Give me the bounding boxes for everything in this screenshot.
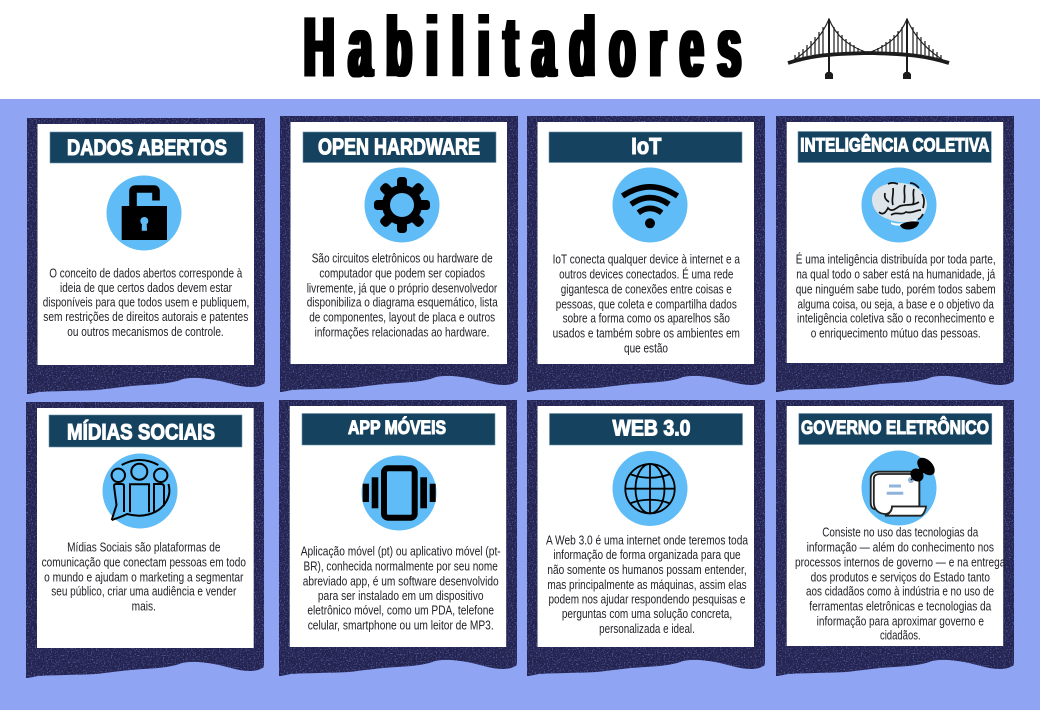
heading bbox=[50, 132, 243, 163]
card background bbox=[776, 400, 1014, 676]
description: informação para aproximar governo e bbox=[817, 615, 984, 629]
description bbox=[307, 251, 498, 339]
description bbox=[553, 252, 740, 355]
description: Mídias Sociais são plataformas de bbox=[67, 541, 220, 555]
heading bbox=[799, 414, 992, 444]
description: aos cidadãos como à indústria e no uso de bbox=[806, 585, 994, 599]
description bbox=[43, 266, 249, 339]
description: A Web 3.0 é uma internet onde teremos toda bbox=[546, 534, 748, 548]
description: computador que podem ser copiados bbox=[319, 266, 485, 280]
card body bbox=[290, 122, 507, 364]
card background bbox=[527, 116, 765, 392]
description: para ser instalado em um dispositivo bbox=[318, 589, 484, 603]
icon: people in speech bubble bbox=[102, 454, 178, 528]
description: IoT conecta qualquer device à internet e a bbox=[553, 252, 740, 266]
description: inteligência coletiva são o reconhecimento e bbox=[797, 312, 994, 326]
card body bbox=[538, 122, 754, 364]
heading bbox=[798, 132, 991, 162]
card body bbox=[787, 122, 1003, 363]
description bbox=[42, 541, 246, 614]
description bbox=[301, 545, 501, 633]
description: o enriquecimento mútuo das pessoas. bbox=[811, 326, 981, 340]
description: celular, smartphone ou um leitor de MP3. bbox=[308, 619, 494, 633]
panel: app moveis bbox=[279, 400, 517, 676]
heading: IoT bbox=[631, 133, 661, 159]
description: disponíveis para que todos usem e publiquem, bbox=[43, 296, 249, 310]
description: BR), conhecida normalmente por seu nome bbox=[304, 560, 498, 574]
panel: open hardware bbox=[280, 116, 518, 392]
icon: open padlock bbox=[106, 176, 182, 250]
card body bbox=[37, 408, 254, 648]
description: não somente os humanos possam entender, bbox=[547, 563, 747, 577]
panel: dados abertos bbox=[27, 118, 265, 394]
heading bbox=[550, 414, 742, 445]
description: informações relacionadas ao hardware. bbox=[315, 325, 489, 339]
description: perguntas com uma solução concreta, bbox=[562, 607, 732, 621]
card background bbox=[280, 116, 518, 392]
description: sobre a forma como os aparelhos são bbox=[563, 312, 730, 326]
card body bbox=[538, 406, 754, 647]
description: disponibiliza o diagrama esquemático, lista bbox=[307, 296, 498, 310]
heading bbox=[302, 414, 495, 445]
heading bbox=[549, 132, 742, 162]
description: São circuitos eletrônicos ou hardware de bbox=[312, 251, 493, 265]
description bbox=[795, 526, 1005, 643]
icon: gear bbox=[364, 168, 440, 242]
description: cidadãos. bbox=[880, 629, 921, 643]
description: mas principalmente as máquinas, assim elas bbox=[547, 578, 747, 592]
description: ou outros mecanismos de controle. bbox=[67, 325, 224, 339]
description: podem nos ajudar respondendo pesquisas e bbox=[548, 593, 746, 607]
description: abreviado app, é um software desenvolvido bbox=[303, 575, 499, 589]
card body bbox=[290, 406, 506, 647]
description: o mundo e ajudam o marketing a segmentar bbox=[44, 571, 243, 585]
description: É uma inteligência distribuída por toda parte, bbox=[796, 251, 996, 266]
heading bbox=[303, 132, 496, 162]
panel: midias sociais bbox=[26, 402, 264, 678]
description: ferramentas eletrônicas e tecnologias da bbox=[809, 600, 991, 614]
heading: INTELIGÊNCIA COLETIVA bbox=[800, 133, 989, 157]
description: livremente, já que o próprio desenvolvedor bbox=[307, 281, 497, 295]
card body bbox=[38, 124, 254, 365]
description: usados e também sobre os ambientes em bbox=[553, 326, 740, 340]
description: na qual todo o saber está na humanidade, já bbox=[796, 267, 995, 281]
description: que estão bbox=[624, 341, 668, 355]
heading: OPEN HARDWARE bbox=[318, 133, 480, 159]
description bbox=[796, 251, 996, 340]
icon: suspension bridge bbox=[788, 19, 949, 79]
description bbox=[546, 534, 748, 636]
description: Aplicação móvel (pt) ou aplicativo móvel (pt- bbox=[301, 545, 501, 559]
description: gigantesca de conexões entre coisas e bbox=[561, 282, 732, 296]
card background bbox=[527, 400, 765, 676]
description: Consiste no uso das tecnologias da bbox=[822, 526, 978, 540]
description: seu público, criar uma audiência e vender bbox=[51, 585, 236, 599]
card body bbox=[787, 406, 1003, 646]
card background bbox=[27, 118, 265, 394]
description: eletrônico móvel, como um PDA, telefone bbox=[307, 604, 494, 618]
heading: DADOS ABERTOS bbox=[67, 135, 227, 160]
description: ideia de que certos dados devem estar bbox=[60, 281, 232, 295]
description: informação de forma organizada para que bbox=[553, 548, 741, 562]
description: mais. bbox=[132, 600, 156, 614]
card background bbox=[279, 400, 517, 676]
icon: mobile phone vibrating bbox=[362, 456, 436, 530]
description: comunicação que conectam pessoas em todo bbox=[42, 556, 246, 570]
description: dos produtos e serviços do Estado tanto bbox=[811, 571, 990, 585]
heading: APP MÓVEIS bbox=[348, 417, 446, 439]
icon: globe bbox=[612, 451, 688, 526]
card background bbox=[776, 116, 1014, 392]
title: Habilitadores bbox=[304, 1, 741, 95]
panel: governo eletronico bbox=[776, 400, 1014, 676]
icon: pinned note bbox=[862, 450, 938, 526]
description: que ninguém sabe tudo, porém todos sabem bbox=[796, 282, 996, 296]
heading: GOVERNO ELETRÔNICO bbox=[801, 415, 989, 439]
icon: brain bbox=[862, 168, 936, 242]
icon: wifi bbox=[612, 168, 688, 242]
description: personalizada e ideal. bbox=[599, 622, 695, 636]
heading: MÍDIAS SOCIAIS bbox=[67, 419, 215, 444]
panel: web 3.0 bbox=[527, 400, 765, 676]
panel: iot bbox=[527, 116, 765, 392]
panel: inteligencia coletiva bbox=[776, 116, 1014, 392]
description: outros devices conectados. É uma rede bbox=[559, 266, 733, 281]
description: sem restrições de direitos autorais e patentes bbox=[43, 310, 248, 324]
description: informação — além do conhecimento nos bbox=[807, 541, 994, 555]
description: O conceito de dados abertos corresponde à bbox=[49, 266, 242, 280]
description: pessoas, que coleta e compartilha dados bbox=[556, 297, 737, 311]
heading: WEB 3.0 bbox=[612, 416, 690, 440]
description: de componentes, layout de placa e outros bbox=[309, 310, 495, 324]
card background bbox=[26, 402, 264, 678]
